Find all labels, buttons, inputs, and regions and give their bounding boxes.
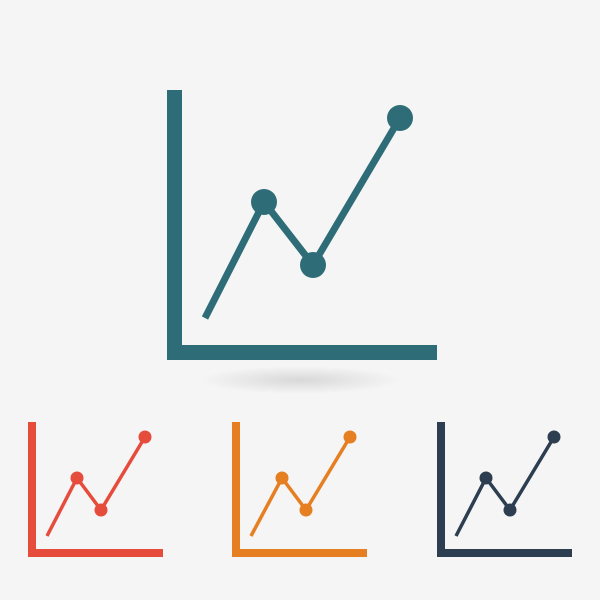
icon: navy line chart (437, 422, 572, 557)
icon: orange line chart (232, 422, 367, 557)
icon: red line chart (28, 422, 163, 557)
shadow under main icon (200, 366, 400, 394)
icon: main line chart (teal) (167, 90, 437, 360)
